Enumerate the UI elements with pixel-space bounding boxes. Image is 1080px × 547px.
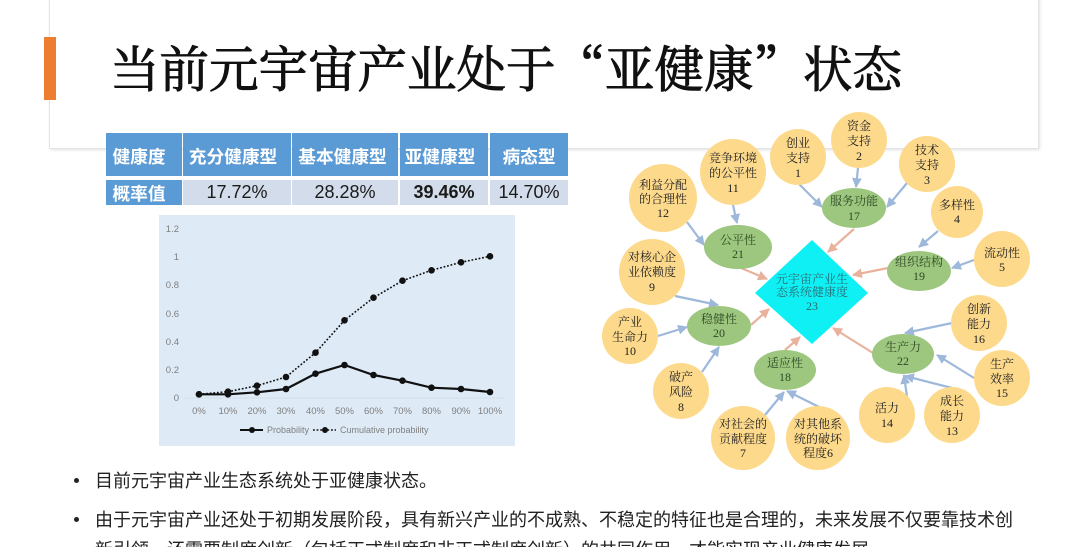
x axis labels: 10% [218,406,238,417]
chart legend: Cumulative probability [340,425,429,435]
node 9: 对核心企 [628,249,676,264]
node 12: 的合理性 [639,191,687,206]
central diamond: ecosystem health 23: 23 [806,299,818,313]
node 19 [887,251,951,291]
node 2: 支持 [847,133,871,148]
x axis labels: 60% [364,406,384,417]
probability series [196,362,493,398]
node 16 [951,295,1007,351]
node 8: 8 [678,400,684,414]
node 6 [786,406,850,470]
node 21: 21 [732,247,744,261]
central diamond: ecosystem health 23: 元宇宙产业生 [776,271,848,286]
y axis labels: 0.2 [166,365,179,376]
value 39.46%: 39.46% [413,182,475,202]
node 11: 11 [727,181,739,195]
node 7: 贡献程度 [719,431,767,446]
node 17: 17 [848,209,860,223]
node 16: 16 [973,332,985,346]
node 20 [687,306,751,346]
header: 健康度: 健康度 [112,147,166,167]
node 3: 3 [924,173,930,187]
value 17.72% [183,180,291,205]
bullet text 1: 目前元宇宙产业生态系统处于亚健康状态。 [95,471,437,491]
x axis labels: 100% [478,406,503,417]
header: 充分健康型 [183,133,291,176]
y axis labels: 0.6 [166,309,179,320]
central diamond: ecosystem health 23: 态系统健康度 [776,284,848,299]
value 14.70% [490,180,568,205]
header: 病态型 [490,133,568,176]
node 22: 生产力 [885,339,921,354]
blue input arrows [658,168,974,415]
node 17 [822,188,886,228]
value 39.46% [400,180,488,205]
node 11 [700,139,766,205]
node 13: 能力 [940,408,964,423]
node 15: 生产 [990,356,1014,371]
node 3: 支持 [915,157,939,172]
node 6: 统的破坏 [794,431,843,446]
node 15 [974,350,1030,406]
node 6: 程度6 [803,445,833,460]
x axis labels: 80% [422,406,442,417]
node 2: 2 [856,149,862,163]
node 14 [859,387,915,443]
node 10: 10 [624,344,636,358]
chart legend [240,425,429,435]
node 20: 20 [713,326,725,340]
node 8: 破产 [669,369,693,384]
x axis labels: 40% [306,406,326,417]
x axis labels: 0% [192,406,206,417]
orange accent bar [44,37,56,100]
node 2: 资金 [847,118,871,133]
node 13: 13 [946,424,958,438]
health probability table [106,133,568,205]
node 14: 活力 [875,400,899,415]
x axis labels: 70% [393,406,413,417]
node 21: 公平性 [720,232,756,247]
node 5 [974,231,1030,287]
value 14.70%: 14.70% [498,182,560,202]
value 28.28%: 28.28% [314,182,376,202]
bullet marker 1 [74,478,79,483]
y axis labels: 0.8 [166,280,179,291]
node 13 [924,387,980,443]
x axis labels [192,406,503,417]
x axis labels: 30% [276,406,296,417]
header card [49,0,1039,149]
node 4: 多样性 [939,197,975,212]
node 12 [629,164,697,232]
y axis labels: 0.4 [166,337,179,348]
node 10 [602,308,658,364]
node 22: 22 [897,354,909,368]
orange arrows into centre [741,229,888,353]
node 21 [704,225,772,269]
node 18: 适应性 [767,355,803,370]
node 13: 成长 [940,393,964,408]
cumulative probability series [196,253,493,398]
line chart: probability and cumulative probability [159,215,515,446]
bullet marker 2 [74,517,79,522]
value 17.72%: 17.72% [206,182,268,202]
header: 病态型: 病态型 [502,147,556,167]
node 12: 利益分配 [639,177,687,192]
node 2 [831,112,887,168]
node 7 [711,406,775,470]
chart legend: Probability [267,425,310,435]
green dimension nodes [687,188,951,390]
ecosystem health diagram [602,112,1030,470]
header: 亚健康型 [400,133,488,176]
header: 充分健康型: 充分健康型 [189,147,277,167]
node 16: 创新 [967,301,991,316]
header: 健康度 [106,133,182,176]
node 18: 18 [779,370,791,384]
node 6: 对其他系 [794,416,842,431]
node 20: 稳健性 [701,311,737,326]
node 3: 技术 [915,142,939,157]
node 12: 12 [657,206,669,220]
node 11: 的公平性 [709,165,757,180]
y axis labels [166,224,179,404]
header: 基本健康型: 基本健康型 [298,147,387,167]
central diamond: ecosystem health 23 [755,240,868,344]
value 28.28% [292,180,398,205]
yellow indicator nodes [602,112,1030,470]
node 8: 风险 [669,385,693,399]
node 10: 生命力 [612,329,648,344]
node 18 [754,350,816,390]
node 10: 产业 [618,314,642,329]
node 4: 4 [954,212,960,226]
node 1 [770,129,826,185]
header: 亚健康型: 亚健康型 [405,147,475,167]
node 17: 服务功能 [830,193,878,208]
node 15: 效率 [990,371,1014,386]
node 9: 业依赖度 [628,264,676,279]
node 22 [872,334,934,374]
node 1: 支持 [786,150,810,165]
node 19: 19 [913,269,925,283]
bullet text 2: 由于元宇宙产业还处于初期发展阶段，具有新兴产业的不成熟、不稳定的特征也是合理的，未来发展不仅要靠技术创 [95,510,1013,530]
node 8 [653,363,709,419]
y axis labels: 1.2 [166,224,179,235]
node 16: 能力 [967,316,991,331]
row label: 概率值 [106,180,182,205]
node 3 [899,136,955,192]
y axis labels: 0 [174,393,179,404]
header: 基本健康型 [292,133,398,176]
node 19: 组织结构 [895,254,943,269]
node 11: 竞争环境 [709,150,757,165]
x axis labels: 20% [247,406,267,417]
node 7: 对社会的 [719,416,767,431]
x axis labels: 90% [451,406,471,417]
node 15: 15 [996,386,1008,400]
node 1: 1 [795,166,801,180]
node 14: 14 [881,416,893,430]
node 1: 创业 [786,135,810,150]
x axis labels: 50% [335,406,355,417]
y axis labels: 1 [174,252,179,263]
node 4 [931,186,983,238]
node 9 [619,239,685,305]
node 7: 7 [740,446,746,460]
node 5: 流动性 [984,245,1020,260]
node 9: 9 [649,280,655,294]
bullet text 2 [95,510,1013,547]
title: 当前元宇宙产业处于“亚健康”状态 [110,31,902,102]
row label: 概率值: 概率值 [112,184,166,204]
node 5: 5 [999,260,1005,274]
